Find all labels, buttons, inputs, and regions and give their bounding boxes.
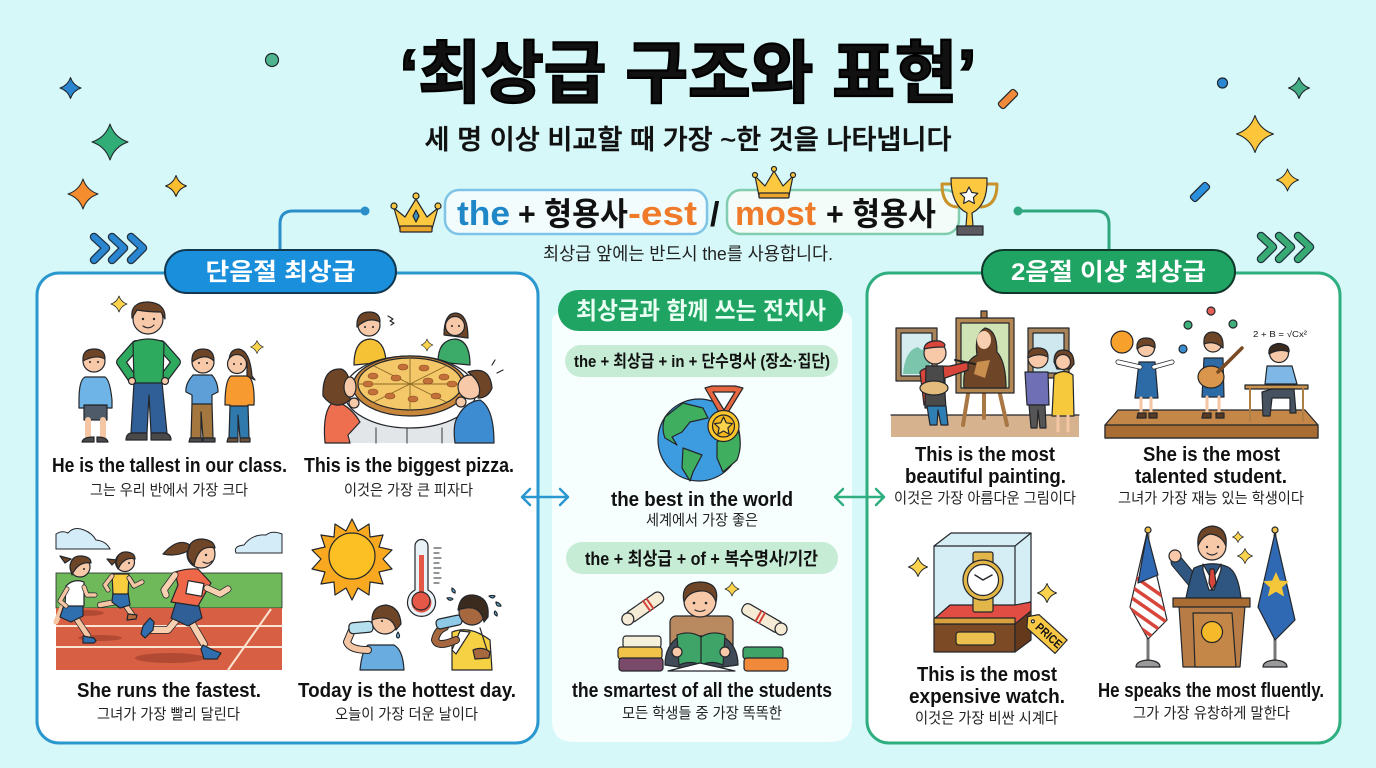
illustration: fastest runner — [56, 529, 282, 670]
connector: formula to left panel — [280, 206, 370, 252]
panel heading: 2음절 이상 최상급 — [1011, 259, 1206, 286]
text: hottest: Today is the hottest day. — [298, 680, 516, 702]
panel heading — [982, 250, 1235, 293]
illustration: tallest student — [79, 296, 264, 442]
formula bar: most — [735, 195, 816, 233]
panel: superlatives with two or more syllables — [867, 250, 1340, 743]
illustration: talented student — [1105, 307, 1318, 438]
formula bar: + 형용사 — [518, 196, 628, 232]
panel heading: 최상급과 함께 쓰는 전치사 — [576, 298, 826, 325]
translation: 이것은 가장 아름다운 그림이다 — [894, 490, 1076, 507]
formula bar — [391, 166, 997, 235]
decorative sparkles and confetti — [60, 54, 1310, 209]
illustration: hottest day — [312, 519, 501, 670]
title: ‘최상급 구조와 표현’ — [400, 36, 976, 112]
text: best: the best in the world — [611, 489, 793, 511]
panel: prepositions used with superlatives — [552, 290, 852, 742]
translation: 이것은 가장 비싼 시계다 — [915, 710, 1058, 727]
icon: studious student — [618, 582, 789, 671]
rule pill: of — [566, 542, 838, 574]
formula bar: + 형용사 — [826, 196, 936, 232]
text: talented student — [1135, 444, 1287, 488]
text: expensive watch: This is the most — [917, 664, 1057, 686]
connector: formula to right panel — [1014, 206, 1109, 252]
formula box: most + adjective — [727, 190, 959, 234]
text: beautiful painting: This is the most — [915, 444, 1055, 466]
icon: trophy — [942, 178, 997, 235]
illustration: biggest pizza — [323, 312, 503, 443]
translation: 세계에서 가장 좋은 — [646, 512, 758, 529]
icon: globe with medal — [658, 386, 743, 481]
text: tallest: He is the tallest in our class. — [52, 455, 287, 477]
panel heading — [165, 250, 396, 293]
text: speaks fluently: He speaks the most fluently. — [1098, 680, 1324, 702]
translation: 오늘이 가장 더운 날이다 — [335, 706, 478, 723]
blue chevrons — [94, 237, 143, 260]
translation: 그녀가 가장 빨리 달린다 — [97, 706, 240, 723]
text: talented student: She is the most — [1143, 444, 1280, 466]
rule pill: in: the + 최상급 + in + 단수명사 (장소·집단) — [574, 352, 830, 371]
math notes: 2 + B = √Cx² — [1253, 329, 1307, 339]
illustration: expensive watch: PRICE — [1033, 620, 1065, 651]
translation: 모든 학생들 중 가장 똑똑한 — [622, 705, 782, 722]
text: beautiful painting: beautiful painting. — [905, 466, 1066, 488]
illustration: fluent speaker — [1122, 526, 1295, 667]
text: expensive watch: expensive watch. — [909, 686, 1065, 708]
text: biggest: This is the biggest pizza. — [304, 455, 514, 477]
panel: monosyllabic superlatives — [37, 250, 538, 743]
text: beautiful painting — [905, 444, 1066, 488]
rule pill: of: the + 최상급 + of + 복수명사/기간 — [585, 549, 818, 569]
translation: 이것은 가장 큰 피자다 — [344, 482, 473, 499]
panel heading: 단음절 최상급 — [206, 259, 356, 286]
illustration: expensive watch — [908, 533, 1067, 653]
illustration: beautiful painting — [891, 311, 1079, 437]
icon: crown top — [752, 166, 796, 198]
green chevrons — [1261, 236, 1310, 259]
subtitle: 세 명 이상 비교할 때 가장 ~한 것을 나타냅니다 — [424, 125, 952, 155]
panel heading — [558, 290, 843, 331]
formula box: the + adjective-est — [445, 190, 707, 234]
icon: crown left — [391, 193, 441, 232]
text: fastest: She runs the fastest. — [77, 680, 261, 702]
text: smartest: the smartest of all the students — [572, 680, 832, 702]
arrow: blue double — [522, 489, 568, 505]
translation: 그는 우리 반에서 가장 크다 — [90, 482, 248, 499]
note: 최상급 앞에는 반드시 the를 사용합니다. — [543, 244, 833, 264]
arrow: green double — [835, 489, 884, 505]
text: expensive watch — [909, 664, 1065, 708]
translation: 그녀가 가장 재능 있는 학생이다 — [1118, 490, 1304, 507]
slash: / — [710, 196, 720, 234]
translation: 그가 가장 유창하게 말한다 — [1133, 705, 1290, 722]
text: talented student: talented student. — [1135, 466, 1287, 488]
formula bar: -est — [628, 195, 697, 233]
formula bar: the — [457, 195, 510, 233]
rule pill: in — [565, 345, 838, 377]
